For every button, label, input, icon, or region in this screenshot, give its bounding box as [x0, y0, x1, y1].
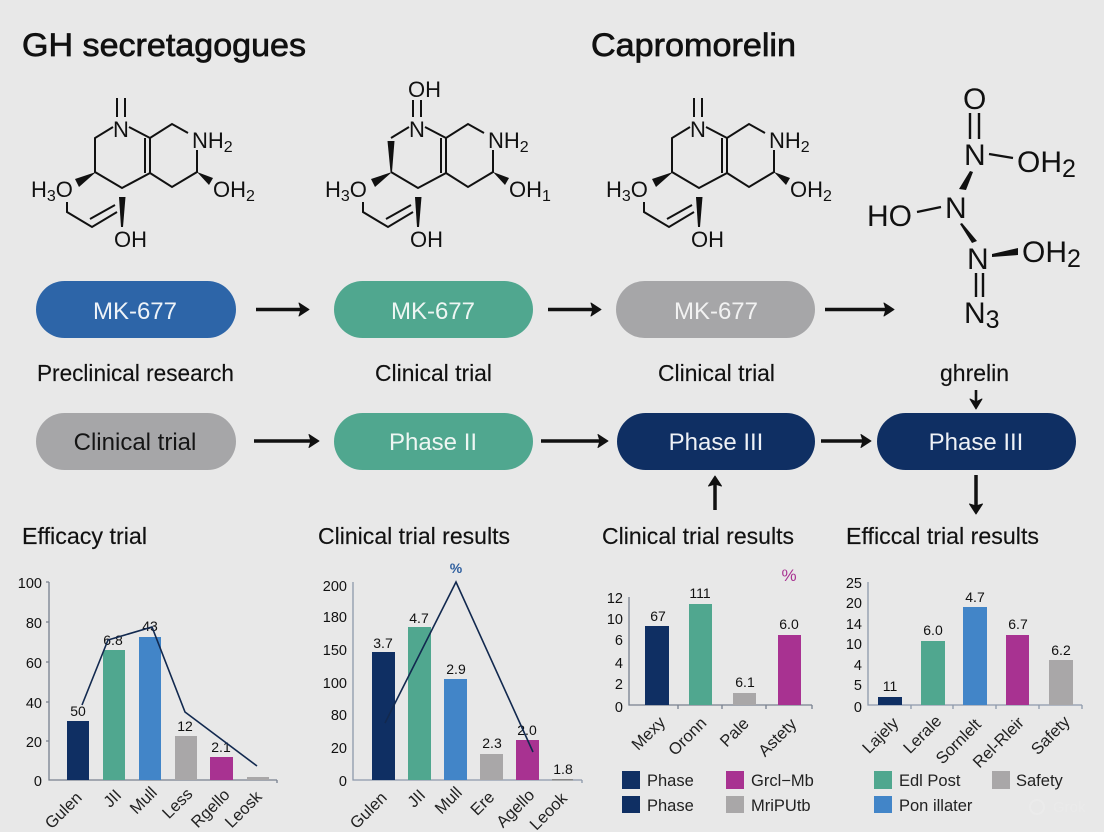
- pill: MK-677 green: [334, 281, 533, 338]
- molecule 2: H: [325, 177, 341, 202]
- pill: Phase III: [617, 413, 815, 470]
- chart 2: 2.3: [482, 735, 502, 751]
- chart 1: 43: [142, 618, 158, 634]
- chart 1: Less: [159, 785, 196, 822]
- chart 4: Rel-Rleir: [970, 713, 1028, 772]
- percent mark: blue: %: [450, 560, 463, 576]
- label: Clinical trial: Clinical trial: [658, 360, 775, 386]
- arrow: [548, 303, 601, 316]
- molecule 4: N: [964, 139, 986, 172]
- watermark: Grok: [1053, 799, 1086, 816]
- molecule 1: [31, 98, 255, 252]
- title: Capromorelin: Capromorelin: [591, 27, 796, 63]
- molecule 1: 3: [47, 188, 56, 205]
- heading: Efficacy trial: Efficacy trial: [22, 523, 147, 549]
- chart 4: 6.2: [1051, 642, 1071, 658]
- legend: chart 3: [622, 771, 814, 815]
- arrow: [821, 434, 871, 448]
- chart 3: [607, 566, 812, 760]
- legend: chart 4: Safety: [1016, 772, 1064, 790]
- molecule 4: OH: [1022, 236, 1067, 269]
- molecule 1: OH: [213, 177, 246, 202]
- chart 2: [323, 560, 582, 832]
- chart 4: 5: [854, 678, 862, 694]
- chart 4: 10: [846, 637, 862, 653]
- arrow: ghrelin down: [970, 390, 982, 409]
- chart 3: 10: [607, 612, 623, 628]
- molecule 4: O: [963, 83, 986, 116]
- chart 1: 6.8: [103, 632, 123, 648]
- molecule 2: 1: [542, 188, 551, 205]
- molecule 2: NH: [488, 128, 520, 153]
- chart 3: 12: [607, 591, 623, 607]
- chart 2: Agello: [493, 786, 538, 831]
- molecule 4: [867, 83, 1081, 334]
- pill: MK-677 blue: [36, 281, 236, 338]
- chart 1: 20: [26, 735, 42, 751]
- percent mark: magenta: %: [781, 566, 797, 585]
- pill: Phase II: Phase II: [389, 429, 477, 456]
- arrow: [825, 303, 894, 316]
- chart 2: 100: [323, 676, 347, 692]
- pill: Clinical trial: Clinical trial: [74, 429, 196, 456]
- chart 3: 2: [615, 677, 623, 693]
- title: GH secretagogues: GH secretagogues: [22, 27, 306, 63]
- pill: Phase II: [334, 413, 533, 470]
- molecule 4: HO: [867, 200, 912, 233]
- molecule 2: O: [350, 177, 367, 202]
- chart 4: 6.0: [923, 622, 943, 638]
- chart 2: 3.7: [373, 635, 393, 651]
- chart 1: Rgello: [188, 786, 234, 832]
- molecule 1: 2: [224, 139, 233, 156]
- heading: Clinical trial results: Clinical trial results: [602, 523, 794, 549]
- molecule 3: OH: [691, 227, 724, 252]
- molecule 1: NH: [192, 128, 224, 153]
- molecule 2: OH: [410, 227, 443, 252]
- pill: Clinical trial: [36, 413, 236, 470]
- chart 2: 4.7: [409, 610, 429, 626]
- chart 1: JII: [100, 786, 125, 811]
- chart 3: 67: [650, 608, 666, 624]
- chart 4: 4.7: [965, 589, 985, 605]
- chart 4: 0: [854, 700, 862, 716]
- chart 2: 180: [323, 610, 347, 626]
- molecule 4: 3: [986, 306, 1000, 334]
- molecule 3: 2: [823, 188, 832, 205]
- molecule 4: N: [945, 192, 967, 225]
- chart 4: Safety: [1028, 712, 1074, 759]
- chart 2: 2.0: [517, 722, 537, 738]
- pill: MK-677 gray: MK-677: [674, 298, 758, 325]
- chart 2: 0: [339, 774, 347, 790]
- chart 3: 6.0: [779, 616, 799, 632]
- legend: chart 4: [874, 771, 1064, 815]
- molecule 3: NH: [769, 128, 801, 153]
- chart 4: 4: [854, 658, 862, 674]
- chart 3: 4: [615, 656, 623, 672]
- pill: Phase III: [877, 413, 1076, 470]
- molecule 4: OH: [1017, 146, 1062, 179]
- chart 4: [846, 576, 1082, 772]
- chart 2: 200: [323, 579, 347, 595]
- arrow: [254, 434, 319, 448]
- watermark: [1030, 799, 1086, 816]
- chart 3: 6: [615, 633, 623, 649]
- label: ghrelin: ghrelin: [940, 360, 1009, 386]
- pill: MK-677 gray: [616, 281, 815, 338]
- chart 2: Ere: [467, 788, 498, 819]
- chart 2: Gulen: [347, 789, 391, 832]
- chart 1: 0: [34, 774, 42, 790]
- molecule 3: [606, 98, 832, 252]
- chart 4: 25: [846, 576, 862, 592]
- arrow: down from Phase III: [970, 475, 982, 514]
- molecule 3: N: [690, 117, 706, 142]
- chart 4: 11: [883, 678, 897, 694]
- molecule 3: 3: [622, 188, 631, 205]
- pill: MK-677 blue: MK-677: [93, 298, 177, 325]
- molecule 3: O: [631, 177, 648, 202]
- chart 4: Lerale: [900, 712, 945, 757]
- molecule 4: N: [964, 297, 986, 330]
- chart 1: 100: [18, 576, 42, 592]
- molecule 1: N: [113, 117, 129, 142]
- chart 2: JII: [404, 786, 429, 811]
- chart 4: 20: [846, 596, 862, 612]
- molecule 1: 2: [246, 188, 255, 205]
- molecule 3: 2: [801, 139, 810, 156]
- molecule 4: 2: [1067, 245, 1081, 273]
- chart 3: Astety: [755, 715, 801, 760]
- chart 3: 0: [615, 700, 623, 716]
- chart 3: Mexy: [628, 713, 670, 754]
- molecule 3: H: [606, 177, 622, 202]
- label: Clinical trial: Clinical trial: [375, 360, 492, 386]
- molecule 1: OH: [114, 227, 147, 252]
- chart 3: 111: [689, 585, 711, 601]
- chart 1: 2.1: [211, 739, 231, 755]
- chart 1: Gulen: [42, 789, 86, 832]
- label: Preclinical research: Preclinical research: [37, 360, 234, 386]
- chart 1: 12: [177, 718, 193, 734]
- chart 4: 6.7: [1008, 616, 1028, 632]
- chart 3: 6.1: [735, 674, 755, 690]
- molecule 4: 2: [1062, 155, 1076, 183]
- molecule 3: OH: [790, 177, 823, 202]
- chart 1: 80: [26, 616, 42, 632]
- legend: chart 3: Phase: [647, 797, 694, 815]
- molecule 1: O: [56, 177, 73, 202]
- legend: chart 4: Edl Post: [899, 772, 961, 790]
- molecule 1: H: [31, 177, 47, 202]
- chart 2: 20: [331, 741, 347, 757]
- heading: Efficcal trial results: Efficcal trial results: [846, 523, 1039, 549]
- chart 2: 80: [331, 708, 347, 724]
- legend: chart 3: Phase: [647, 772, 694, 790]
- chart 2: Mull: [432, 784, 466, 818]
- molecule 2: OH: [408, 77, 441, 102]
- molecule 2: 3: [341, 188, 350, 205]
- chart 1: Mull: [127, 784, 161, 818]
- chart 1: 40: [26, 696, 42, 712]
- arrow: [256, 303, 309, 316]
- chart 3: Pale: [717, 715, 753, 751]
- chart 2: 2.9: [446, 661, 466, 677]
- legend: chart 3: MriPUtb: [751, 797, 811, 815]
- pill: MK-677 green: MK-677: [391, 298, 475, 325]
- pill: Phase III: Phase III: [669, 429, 763, 456]
- molecule 2: OH: [509, 177, 542, 202]
- chart 1: 50: [70, 703, 86, 719]
- legend: chart 3: Grcl−Mb: [751, 772, 814, 790]
- pill: Phase III: Phase III: [929, 429, 1023, 456]
- chart 2: 1.8: [553, 761, 573, 777]
- chart 4: Lajely: [859, 714, 903, 757]
- molecule 2: [325, 77, 551, 252]
- chart 2: 150: [323, 643, 347, 659]
- chart 1: 60: [26, 656, 42, 672]
- legend: chart 4: Pon illater: [899, 797, 973, 815]
- molecule 4: N: [967, 243, 989, 276]
- molecule 2: 2: [520, 139, 529, 156]
- chart 3: Oronn: [665, 714, 710, 759]
- heading: Clinical trial results: Clinical trial results: [318, 523, 510, 549]
- chart 4: Sornlelt: [933, 715, 985, 768]
- chart 4: 14: [846, 617, 862, 633]
- chart 1: [18, 576, 277, 832]
- chart 1: Leosk: [222, 787, 266, 832]
- arrow: up to Phase III: [708, 476, 722, 510]
- molecule 2: N: [409, 117, 425, 142]
- arrow: [541, 434, 608, 448]
